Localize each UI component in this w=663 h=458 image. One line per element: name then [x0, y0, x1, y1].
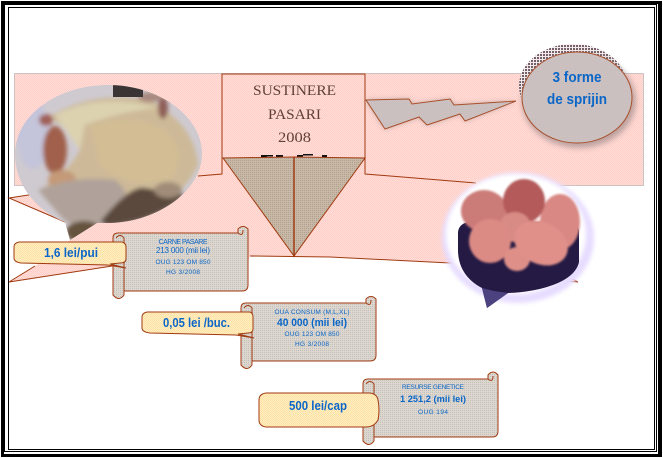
- inverted triangle: [223, 157, 365, 256]
- callout: 3 forme de sprijin: de sprijin: [547, 91, 607, 108]
- label: 500 lei/cap: [259, 393, 379, 427]
- scroll: resurse genetice: [363, 372, 498, 444]
- lightning arrow: [366, 99, 516, 129]
- scroll: oua consum: OUG 123 OM 850: [284, 331, 340, 338]
- clipped black text marks: [261, 154, 327, 158]
- photo: eggs in bowl: [442, 173, 594, 308]
- scroll: resurse genetice: RESURSE GENETICE: [402, 384, 465, 391]
- scroll: oua consum: 40 000 (mii lei): [277, 317, 347, 329]
- pink background panel: [14, 74, 644, 186]
- scroll: carne pasare: OUG 123 OM 850: [156, 259, 211, 266]
- label: 1,6 lei/pui: [14, 242, 126, 268]
- scroll: oua consum: [241, 296, 376, 368]
- label: 1,6 lei/pui: 1,6 lei/pui: [44, 245, 98, 260]
- scroll: resurse genetice: OUG 194: [418, 409, 448, 416]
- pink callout shape: [9, 74, 578, 282]
- title: Sustinere pasari 2008: [253, 83, 336, 146]
- callout: 3 forme de sprijin: 3 forme: [552, 69, 602, 86]
- scroll: oua consum: OUA CONSUM (M,L,XL): [274, 309, 350, 316]
- scroll: oua consum: HG 3/2008: [295, 341, 329, 348]
- label: 500 lei/cap: 500 lei/cap: [289, 398, 347, 413]
- callout: 3 forme de sprijin: [519, 44, 636, 148]
- label: 0,05 lei/buc: [142, 312, 254, 338]
- scroll: carne pasare: 213 000 (mii lei): [156, 246, 210, 255]
- scroll: carne pasare: [113, 226, 248, 298]
- scroll: resurse genetice: 1 251,2 (mii lei): [400, 394, 466, 405]
- scroll: carne pasare: CARNE PASARE: [158, 239, 208, 246]
- scroll: carne pasare: HG 3/2008: [166, 269, 200, 276]
- title: Sustinere pasari 2008: PASARI: [268, 107, 321, 123]
- label: 0,05 lei/buc: 0,05 lei /buc.: [163, 315, 230, 330]
- title: Sustinere pasari 2008: 2008: [278, 130, 311, 146]
- title: Sustinere pasari 2008: SUSTINERE: [253, 83, 336, 99]
- photo: chicken: [15, 85, 202, 240]
